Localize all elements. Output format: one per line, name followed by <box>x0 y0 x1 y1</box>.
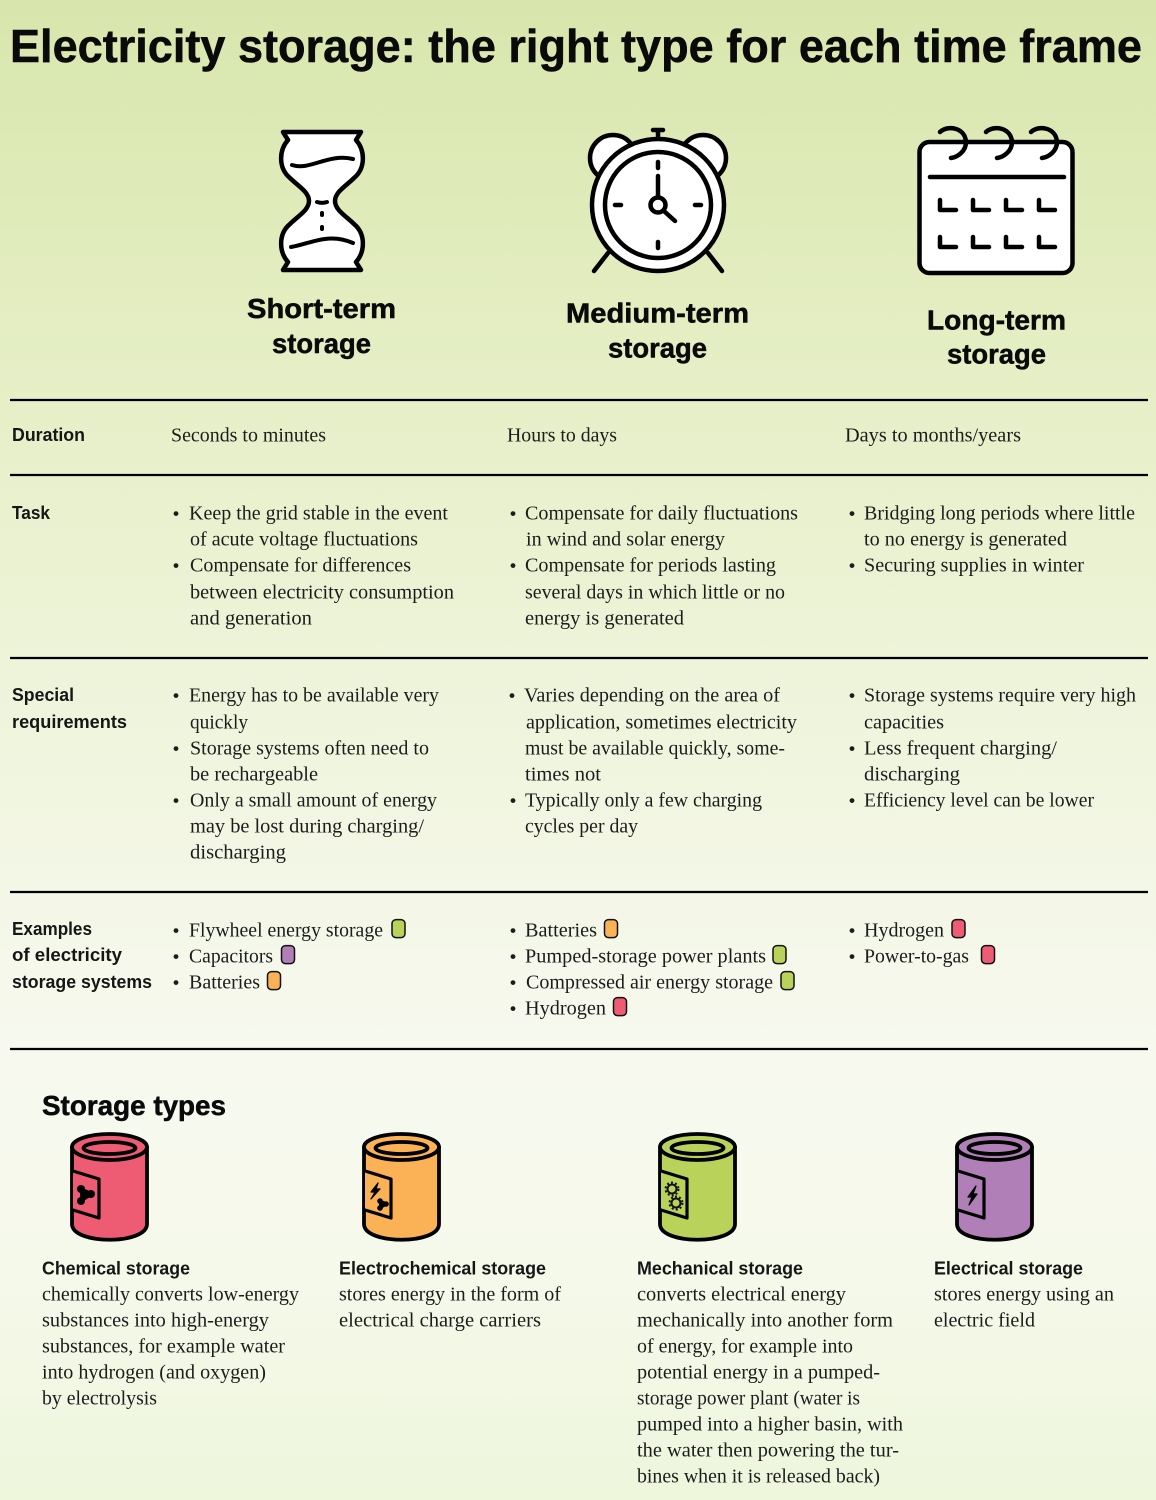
requirements: short-term: discharging <box>190 843 286 864</box>
heading: medium-term storage: Medium-term <box>566 298 749 328</box>
requirements: medium-term: Varies depending on the area of <box>524 686 781 707</box>
text: chemical storage: substances into high-energy <box>42 1311 269 1332</box>
requirements: medium-term: times not <box>525 765 602 786</box>
text: chemical storage: Chemical storage <box>42 1259 190 1279</box>
examples: short-term: Flywheel energy storage <box>189 921 383 942</box>
requirements: medium-term: application, sometimes electricity <box>526 713 797 734</box>
task: long-term: Bridging long periods where little <box>864 504 1135 525</box>
text: mechanical storage: pumped into a higher basin, with <box>637 1415 903 1436</box>
icon: hourglass <box>281 132 363 270</box>
row: special requirements: requirements <box>12 712 127 732</box>
examples: medium-term: Batteries <box>525 921 597 942</box>
text: mechanical storage: potential energy in a pumped- <box>637 1363 880 1384</box>
row: duration <box>12 425 1021 447</box>
icon: calendar <box>920 128 1072 273</box>
task: short-term: between electricity consumption <box>190 583 454 604</box>
examples: long-term <box>850 920 994 968</box>
row: examples of electricity storage systems <box>12 919 994 1020</box>
examples: short-term: Capacitors <box>189 947 273 968</box>
heading: medium-term storage <box>566 298 749 364</box>
requirements: short-term: Storage systems often need to <box>190 739 429 760</box>
row: examples of electricity storage systems: storage systems <box>12 972 152 992</box>
task: short-term <box>174 504 454 630</box>
task: medium-term: in wind and solar energy <box>526 530 725 551</box>
icon: chemical storage cylinder <box>72 1134 147 1240</box>
text: chemical storage: substances, for example water <box>42 1337 286 1358</box>
requirements: long-term: Less frequent charging/ <box>864 739 1058 760</box>
heading: storage types: Storage types <box>42 1090 226 1121</box>
row: task <box>12 503 1135 630</box>
row: duration: Hours to days <box>507 426 617 447</box>
heading: short-term storage: storage <box>272 328 371 359</box>
examples: medium-term: Compressed air energy storage <box>526 973 773 994</box>
requirements: medium-term <box>510 686 797 838</box>
text: mechanical storage: converts electrical energy <box>637 1285 846 1306</box>
text: electrical storage: electric field <box>934 1311 1035 1332</box>
text: mechanical storage: the water then powering the tur- <box>637 1441 899 1462</box>
task: medium-term: Compensate for daily fluctuations <box>525 504 798 525</box>
requirements: long-term: Storage systems require very high <box>864 686 1136 707</box>
text: electrochemical storage: electrical charge carriers <box>339 1311 541 1332</box>
row: special requirements: Special <box>12 685 74 705</box>
row: duration: Days to months/years <box>845 426 1021 447</box>
task: short-term: and generation <box>190 609 312 630</box>
row: examples of electricity storage systems: Examples <box>12 919 92 939</box>
requirements: medium-term: cycles per day <box>525 817 638 838</box>
heading: long-term storage: storage <box>947 338 1046 370</box>
task: medium-term: Compensate for periods lasting <box>525 556 776 577</box>
examples: short-term: Batteries <box>189 973 260 994</box>
title: Electricity storage: the right type for each time frame <box>10 20 1142 72</box>
icon: mechanical storage cylinder <box>660 1134 735 1240</box>
examples: medium-term: Pumped-storage power plants <box>525 947 766 968</box>
heading: short-term storage <box>247 293 396 359</box>
requirements: medium-term: must be available quickly, some- <box>525 739 785 760</box>
requirements: short-term: quickly <box>190 713 248 734</box>
text: electrical storage: stores energy using an <box>934 1285 1114 1306</box>
examples: long-term: Power-to-gas <box>864 947 969 968</box>
requirements: short-term <box>174 686 439 864</box>
text: chemical storage: into hydrogen (and oxygen) <box>42 1363 266 1384</box>
examples: medium-term: Hydrogen <box>525 999 606 1020</box>
task: long-term <box>850 504 1135 577</box>
text: mechanical storage: mechanically into another form <box>637 1311 893 1332</box>
requirements: long-term: Efficiency level can be lower <box>864 791 1095 812</box>
examples: short-term <box>174 920 405 994</box>
heading: long-term storage: Long-term <box>927 304 1066 336</box>
task: short-term: Compensate for differences <box>190 556 411 577</box>
task: medium-term: energy is generated <box>525 609 684 630</box>
requirements: short-term: Only a small amount of energy <box>190 791 437 812</box>
text: chemical storage: by electrolysis <box>42 1389 157 1410</box>
text: electrochemical storage: Electrochemical storage <box>339 1259 546 1279</box>
text: chemical storage: chemically converts low-energy <box>42 1285 299 1306</box>
task: short-term: Keep the grid stable in the event <box>189 504 449 525</box>
requirements: short-term: Energy has to be available very <box>189 686 439 707</box>
text: mechanical storage: of energy, for example into <box>637 1337 853 1358</box>
text: electrical storage <box>934 1259 1114 1332</box>
task: short-term: of acute voltage fluctuations <box>190 530 418 551</box>
text: mechanical storage: storage power plant (water is <box>637 1389 860 1410</box>
task: long-term: to no energy is generated <box>864 530 1067 551</box>
requirements: long-term: discharging <box>864 765 960 786</box>
row: task: Task <box>12 503 51 523</box>
heading: long-term storage <box>927 304 1066 370</box>
text: chemical storage <box>42 1259 299 1410</box>
row: duration: Seconds to minutes <box>171 426 326 447</box>
text: electrical storage: Electrical storage <box>934 1259 1083 1279</box>
requirements: long-term <box>850 686 1136 812</box>
requirements: medium-term: Typically only a few charging <box>525 791 762 812</box>
text: electrochemical storage <box>339 1259 562 1332</box>
icon: electrical storage cylinder <box>957 1134 1032 1240</box>
examples: long-term: Hydrogen <box>864 921 944 942</box>
icon: alarm clock <box>590 130 726 271</box>
text: mechanical storage <box>637 1259 903 1488</box>
text: electrochemical storage: stores energy in the form of <box>339 1285 562 1306</box>
heading: short-term storage: Short-term <box>247 293 396 324</box>
row: special requirements <box>12 685 1136 864</box>
task: medium-term <box>511 504 798 630</box>
examples: medium-term <box>511 920 794 1020</box>
text: mechanical storage: Mechanical storage <box>637 1259 803 1279</box>
heading: medium-term storage: storage <box>608 332 707 364</box>
task: medium-term: several days in which little or no <box>525 583 785 604</box>
text: mechanical storage: bines when it is released back) <box>637 1467 880 1488</box>
requirements: long-term: capacities <box>864 713 944 734</box>
row: duration: Duration <box>12 425 85 445</box>
row: examples of electricity storage systems: of electricity <box>12 945 122 965</box>
requirements: short-term: be rechargeable <box>190 765 318 786</box>
requirements: short-term: may be lost during charging/ <box>190 817 425 838</box>
icon: electrochemical storage cylinder <box>364 1134 439 1240</box>
task: long-term: Securing supplies in winter <box>864 556 1085 577</box>
